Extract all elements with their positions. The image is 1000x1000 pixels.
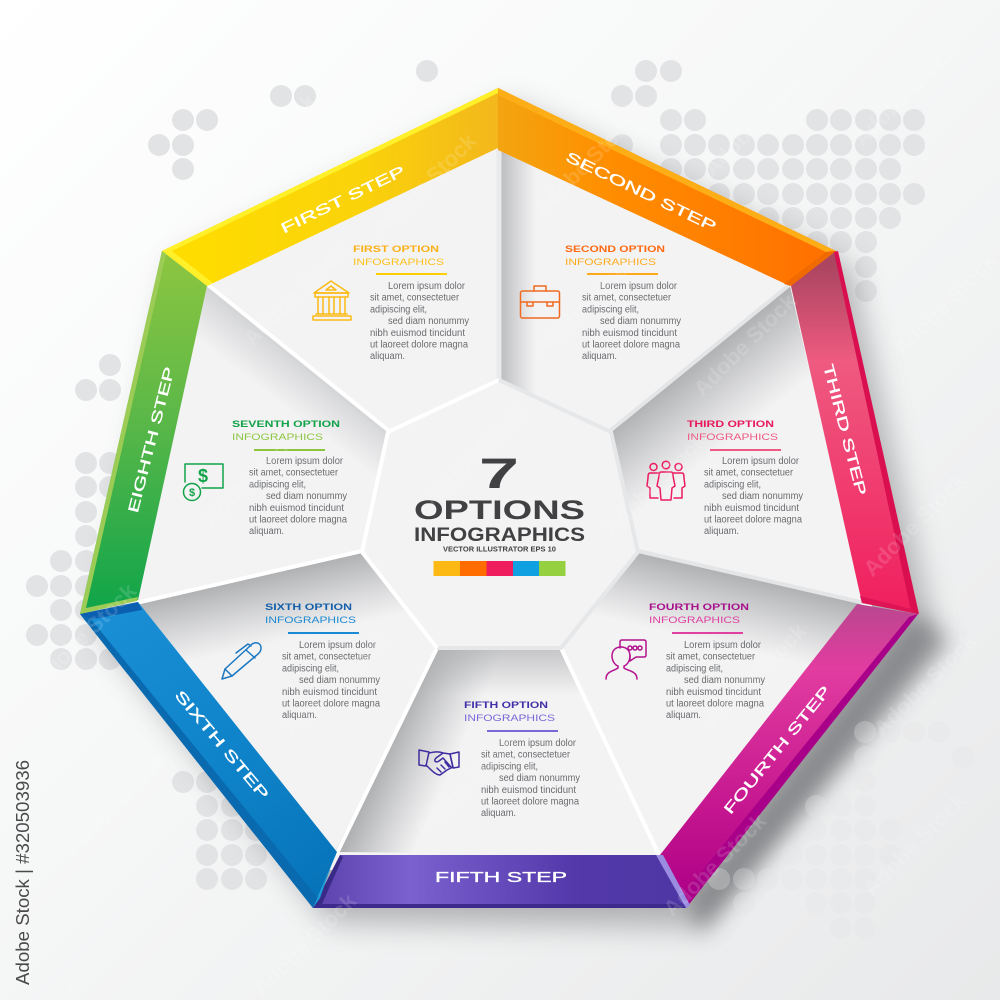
body text: adipiscing elit, xyxy=(481,761,538,772)
colour bar xyxy=(434,561,566,576)
icon: money: $ xyxy=(189,487,195,499)
center subheading: INFOGRAPHICS xyxy=(414,525,585,546)
watermark pattern: Adobe Stock xyxy=(528,248,642,361)
body text: aliquam. xyxy=(704,526,739,537)
body text xyxy=(282,640,380,721)
subtitle: INFOGRAPHICS xyxy=(687,432,778,443)
body text: nibh euismod tincidunt xyxy=(481,785,576,796)
icon: people xyxy=(647,461,685,500)
label: fifth step: FIFTH STEP xyxy=(435,870,567,886)
title: FOURTH OPTION xyxy=(649,602,749,613)
title: FIRST OPTION xyxy=(353,244,439,255)
body text: adipiscing elit, xyxy=(582,304,639,315)
title: SIXTH OPTION xyxy=(265,602,352,613)
body text: aliquam. xyxy=(582,351,617,362)
body text: sed diam nonummy xyxy=(600,316,681,327)
label: eighth step: EIGHTH STEP xyxy=(126,365,178,515)
watermark pattern: Adobe Stock xyxy=(858,788,972,901)
title: SEVENTH OPTION xyxy=(232,419,340,430)
block: fourth option xyxy=(606,602,765,721)
body text: adipiscing elit, xyxy=(666,663,723,674)
body text: aliquam. xyxy=(249,526,284,537)
body text: Lorem ipsum dolor xyxy=(299,640,377,651)
body text: sit amet, consectetuer xyxy=(704,468,794,479)
label: fourth step: FOURTH STEP xyxy=(721,683,834,818)
body text xyxy=(370,281,469,362)
underline xyxy=(288,632,359,634)
body text: ut laoreet dolore magna xyxy=(249,514,347,526)
center heptagon xyxy=(362,380,638,648)
body text: sit amet, consectetuer xyxy=(582,293,672,304)
icon: money xyxy=(184,464,223,500)
title: THIRD OPTION xyxy=(687,419,774,430)
title: FIFTH OPTION xyxy=(464,700,548,711)
icon: person with speech bubble xyxy=(606,640,646,679)
body text: ut laoreet dolore magna xyxy=(582,340,680,350)
background dot map xyxy=(26,60,925,890)
underline xyxy=(254,449,325,451)
band: second step xyxy=(498,88,836,286)
subtitle: INFOGRAPHICS xyxy=(464,713,555,724)
watermark pattern: Adobe Stock xyxy=(48,58,162,171)
body text: sed diam nonummy xyxy=(722,491,803,502)
stock credit: Adobe Stock | #320503936 xyxy=(13,760,33,985)
icon: pen xyxy=(222,643,261,679)
panel: second option sheet xyxy=(498,148,790,432)
watermark pattern: Adobe Stock xyxy=(658,808,772,921)
band: fourth step xyxy=(660,604,918,908)
body text xyxy=(704,456,803,537)
body text xyxy=(582,281,681,362)
band: fifth step xyxy=(313,855,690,908)
watermark pattern: Adobe Stock xyxy=(278,628,392,741)
body text: nibh euismod tincidunt xyxy=(370,328,465,339)
subtitle: INFOGRAPHICS xyxy=(353,257,444,268)
body text: Lorem ipsum dolor xyxy=(499,738,577,749)
heptagon drop shadow xyxy=(100,104,932,926)
panel: fourth option sheet xyxy=(561,552,862,855)
fourth band deep shadow xyxy=(690,614,950,935)
panel: fifth option sheet xyxy=(335,648,660,855)
panel: third option sheet xyxy=(611,286,862,603)
subtitle: INFOGRAPHICS xyxy=(565,257,656,268)
body text: adipiscing elit, xyxy=(282,663,339,674)
body text: ut laoreet dolore magna xyxy=(666,698,764,710)
watermark pattern: Adobe Stock xyxy=(238,238,352,351)
band: eighth step xyxy=(80,251,207,614)
label: third step: THIRD STEP xyxy=(819,363,869,497)
icon: briefcase xyxy=(520,286,560,318)
block: first option xyxy=(313,244,469,362)
panel: fifth option top shading xyxy=(335,648,660,855)
body text: nibh euismod tincidunt xyxy=(582,328,677,339)
body text: aliquam. xyxy=(282,710,317,721)
body text: Lorem ipsum dolor xyxy=(266,456,344,467)
faint dots over shadow xyxy=(708,721,974,939)
watermark pattern: Adobe Stock xyxy=(598,428,712,541)
body text: sit amet, consectetuer xyxy=(481,750,571,761)
panel: first option sheet xyxy=(207,148,498,432)
watermark pattern: Adobe Stock xyxy=(208,88,322,201)
body text: Lorem ipsum dolor xyxy=(722,456,800,467)
panel: seventh option sheet xyxy=(138,286,388,602)
body text xyxy=(481,738,580,819)
body text: Lorem ipsum dolor xyxy=(388,281,466,292)
subtitle: INFOGRAPHICS xyxy=(649,615,740,626)
body text: sed diam nonummy xyxy=(388,316,469,327)
watermark pattern: Adobe Stock xyxy=(698,68,812,181)
subtitle: INFOGRAPHICS xyxy=(265,615,356,626)
subtitle: INFOGRAPHICS xyxy=(232,432,323,443)
body text: Lorem ipsum dolor xyxy=(600,281,678,292)
watermark pattern: Adobe Stock xyxy=(528,108,642,221)
watermark pattern: Adobe Stock xyxy=(418,398,532,511)
body text: adipiscing elit, xyxy=(370,304,427,315)
body text: sit amet, consectetuer xyxy=(370,293,460,304)
body text: ut laoreet dolore magna xyxy=(282,698,380,710)
watermark pattern: Adobe Stock xyxy=(198,418,312,531)
label: second step: SECOND STEP xyxy=(563,149,719,235)
panel: inner sheets xyxy=(125,135,872,870)
body text: nibh euismod tincidunt xyxy=(249,503,344,514)
icon: bank xyxy=(313,281,351,320)
body text: ut laoreet dolore magna xyxy=(481,796,579,808)
block: fifth option xyxy=(419,700,580,819)
body text: sed diam nonummy xyxy=(499,773,580,784)
label: first step: FIRST STEP xyxy=(279,163,408,237)
underline xyxy=(710,449,781,451)
watermark pattern: Adobe Stock xyxy=(868,628,982,741)
body text: aliquam. xyxy=(370,351,405,362)
band: first step xyxy=(162,88,498,286)
body text: sit amet, consectetuer xyxy=(249,468,339,479)
body text xyxy=(666,640,765,721)
panel: sixth option sheet xyxy=(135,552,437,852)
watermark pattern: Adobe Stock xyxy=(248,888,362,1000)
body text: adipiscing elit, xyxy=(704,479,761,490)
band: third step xyxy=(791,251,919,614)
block: second option xyxy=(520,244,681,362)
watermark pattern: Adobe Stock xyxy=(18,278,132,391)
block: third option xyxy=(647,419,803,537)
body text: ut laoreet dolore magna xyxy=(704,514,802,526)
body text: sit amet, consectetuer xyxy=(282,652,372,663)
watermark pattern: Adobe Stock xyxy=(368,128,482,241)
body text: aliquam. xyxy=(481,808,516,819)
watermark pattern: Adobe Stock xyxy=(58,748,172,861)
watermark pattern: Adobe Stock xyxy=(28,578,142,691)
body text: sit amet, consectetuer xyxy=(666,652,756,663)
block: seventh option xyxy=(184,419,347,537)
title: SECOND OPTION xyxy=(565,244,665,255)
watermark pattern: Adobe Stock xyxy=(408,728,522,841)
center number: 7 xyxy=(479,450,519,498)
center caption: VECTOR ILLUSTRATOR EPS 10 xyxy=(443,546,556,554)
underline xyxy=(587,273,658,275)
watermark pattern: Adobe Stock xyxy=(858,468,972,581)
body text: nibh euismod tincidunt xyxy=(282,687,377,698)
watermark pattern: Adobe Stock xyxy=(848,38,962,151)
body text: nibh euismod tincidunt xyxy=(704,503,799,514)
body text: sed diam nonummy xyxy=(684,675,765,686)
watermark pattern: Adobe Stock xyxy=(698,618,812,731)
body text: adipiscing elit, xyxy=(249,479,306,490)
underline xyxy=(376,273,447,275)
watermark pattern: Adobe Stock xyxy=(888,248,1000,361)
body text: ut laoreet dolore magna xyxy=(370,340,468,350)
underline xyxy=(487,730,558,732)
body text: Lorem ipsum dolor xyxy=(684,640,762,651)
body text: sed diam nonummy xyxy=(299,675,380,686)
center heading: OPTIONS xyxy=(414,495,585,525)
underline xyxy=(672,632,743,634)
icon: money: $ xyxy=(198,466,208,486)
label: sixth step: SIXTH STEP xyxy=(171,688,271,803)
block: sixth option xyxy=(222,602,380,721)
body text xyxy=(249,456,347,537)
body text: sed diam nonummy xyxy=(266,491,347,502)
body text: aliquam. xyxy=(666,710,701,721)
band: sixth step xyxy=(80,602,337,908)
body text: nibh euismod tincidunt xyxy=(666,687,761,698)
icon: handshake xyxy=(419,750,459,775)
watermark pattern: Adobe Stock xyxy=(688,288,802,401)
